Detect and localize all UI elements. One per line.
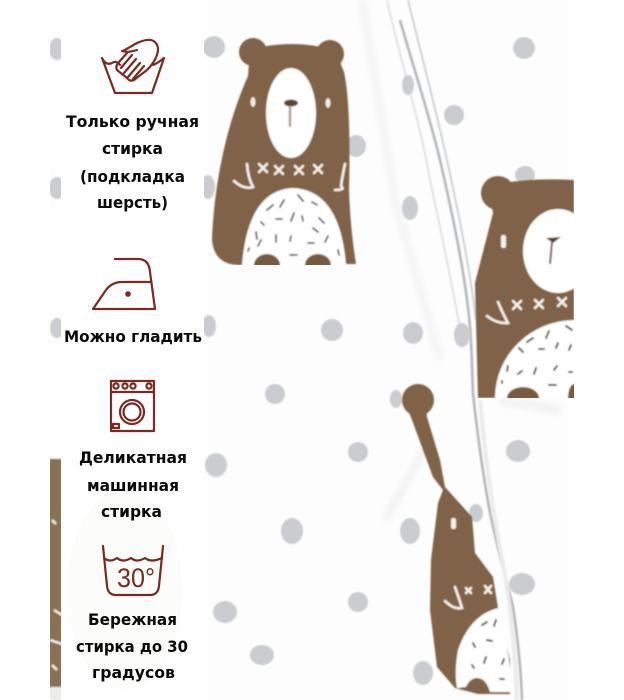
text: can be ironed: Можно гладить: [64, 327, 202, 346]
care item: delicate machine wash: [79, 381, 187, 521]
bear: lower centre: [402, 384, 512, 694]
bear: upper left: [212, 38, 356, 276]
icon: iron: [93, 259, 155, 309]
icon: hand wash basin: [102, 40, 164, 93]
icon: washing machine: [111, 381, 154, 431]
panel: care instructions: [61, 0, 204, 700]
text: hand wash only: (подкладка: [80, 167, 185, 186]
text: hand wash only: Только ручная: [66, 112, 199, 131]
text: gentle wash up to 30 degrees: градусов: [92, 663, 175, 682]
fabric folds and zipper seam: [388, 399, 556, 515]
text: gentle wash up to 30 degrees: Бережная: [88, 610, 177, 629]
care item: gentle wash 30 degrees: [76, 546, 188, 682]
text: delicate machine wash: машинная: [87, 476, 179, 495]
text: hand wash only: шерсть): [97, 193, 168, 212]
grey polka dots: [49, 36, 535, 685]
care item: ironing: [64, 259, 202, 346]
bear: right: [474, 175, 574, 398]
ghost of the bear behind the panel: [67, 490, 183, 690]
text: delicate machine wash: Деликатная: [79, 448, 187, 467]
text: hand wash only: стирка: [102, 139, 163, 158]
bear: cropped at left edge: [50, 458, 61, 700]
text: gentle wash up to 30 degrees: стирка до 30: [76, 637, 188, 656]
icon: wash basin 30 degrees: 30°: [117, 563, 155, 593]
text: delicate machine wash: стирка: [101, 502, 162, 521]
text: hand wash only: [66, 112, 199, 212]
care item: hand wash: [66, 40, 199, 212]
zipper seam: [387, 0, 522, 700]
text: gentle wash up to 30 degrees: [76, 610, 188, 682]
text: delicate machine wash: [79, 448, 187, 521]
